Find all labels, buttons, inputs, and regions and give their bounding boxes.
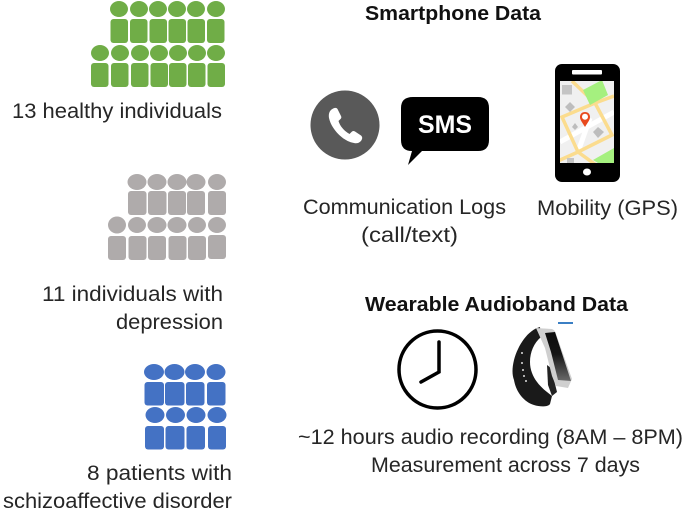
label: 11 individuals with depression: 11 individuals with	[42, 283, 223, 306]
label: 8 patients with schizoaffective disorder: 8 patients with	[87, 462, 232, 485]
icon: wearable audioband	[512, 322, 573, 406]
text: recording details	[298, 426, 683, 477]
icon: clock	[399, 331, 476, 408]
label: Communication Logs (call/text): Communication Logs	[303, 196, 506, 219]
label: 11 individuals with depression: depression	[116, 311, 223, 334]
text: recording details: Measurement across 7 days	[371, 454, 640, 477]
label: 11 individuals with depression	[42, 283, 223, 334]
group: schizoaffective icons	[144, 364, 226, 450]
label: 13 healthy individuals: 13 healthy individuals	[12, 100, 222, 123]
text: recording details: ~12 hours audio recording (8AM – 8PM)	[298, 426, 683, 449]
icon: SMS bubble	[401, 97, 489, 165]
label: 8 patients with schizoaffective disorder	[3, 462, 232, 512]
label: Communication Logs (call/text): (call/text)	[361, 224, 458, 247]
heading: Wearable Audioband Data: Wearable Audioband Data	[365, 293, 629, 316]
icon: phone call	[310, 90, 380, 160]
icon: smartphone with map	[555, 64, 620, 182]
icon: SMS bubble: SMS	[418, 111, 472, 139]
heading: Smartphone Data: Smartphone Data	[365, 2, 542, 25]
label: Communication Logs (call/text)	[303, 196, 506, 247]
group: healthy individuals icons	[91, 1, 225, 87]
label: Mobility (GPS): Mobility (GPS)	[537, 197, 678, 220]
group: depression icons	[108, 174, 226, 260]
